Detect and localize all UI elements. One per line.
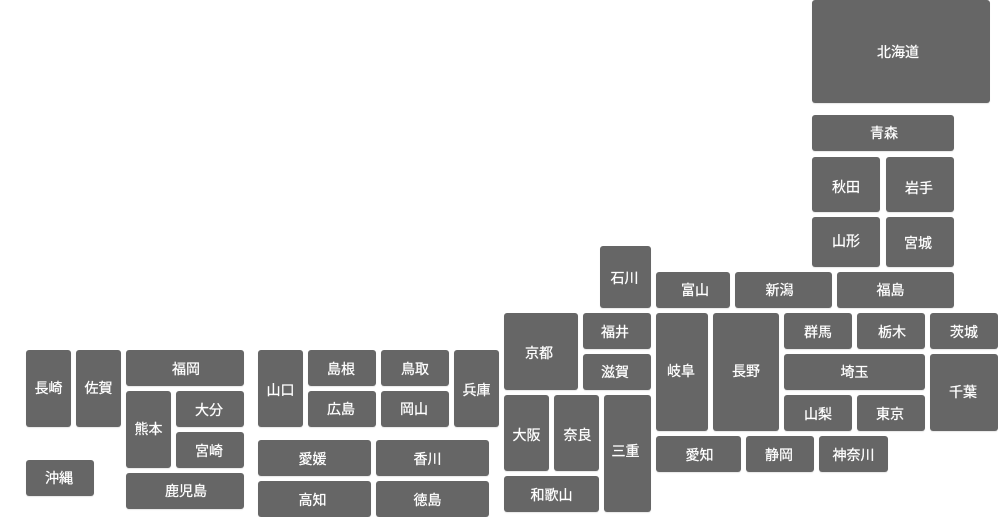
tile: Kagoshima xyxy=(126,473,244,509)
tile: Miyazaki xyxy=(176,432,244,468)
tile: Ishikawa: 石川 xyxy=(610,270,638,286)
tile: Okayama: 岡山 xyxy=(400,401,428,417)
tile: Kumamoto: 熊本 xyxy=(134,420,162,436)
tile: Wakayama: 和歌山 xyxy=(530,487,572,503)
tile: Kyoto: 京都 xyxy=(525,344,553,360)
tile: Tokushima: 徳島 xyxy=(414,492,442,508)
tile: Shiga xyxy=(583,354,651,390)
tile: Miyagi: 宮城 xyxy=(904,235,932,251)
tile: Saitama xyxy=(784,354,925,390)
tile: Toyama xyxy=(656,272,730,308)
tile: Fukuoka xyxy=(126,350,244,386)
tile: Okinawa: 沖縄 xyxy=(45,470,73,486)
tile: Kagoshima: 鹿児島 xyxy=(165,483,207,499)
tile: Iwate xyxy=(886,157,954,212)
tile: Saga xyxy=(76,350,121,427)
tile: Hyogo xyxy=(454,350,499,427)
tile: Shimane: 島根 xyxy=(327,361,355,377)
tile: Fukui xyxy=(583,313,651,349)
tile: Osaka: 大阪 xyxy=(512,427,540,443)
tile: Niigata: 新潟 xyxy=(766,282,794,298)
tile: Akita: 秋田 xyxy=(832,178,860,194)
tile: Gunma xyxy=(784,313,852,349)
tile: Chiba xyxy=(930,354,998,431)
tile: Kanagawa: 神奈川 xyxy=(832,447,874,463)
tile: Kagawa xyxy=(376,440,489,476)
tile: Tokushima xyxy=(376,481,489,517)
tile: Mie xyxy=(604,395,651,512)
tile: Tokyo xyxy=(857,395,925,431)
tile: Yamaguchi: 山口 xyxy=(266,382,294,398)
tile: Hokkaido xyxy=(812,0,990,103)
tile: Tottori: 鳥取 xyxy=(401,361,429,377)
tile: Ishikawa xyxy=(600,246,651,308)
tile: Niigata xyxy=(735,272,832,308)
tile: Tochigi: 栃木 xyxy=(878,324,906,340)
tile: Ehime xyxy=(258,440,371,476)
tile: Yamanashi xyxy=(784,395,852,431)
tile: Chiba: 千葉 xyxy=(949,384,977,400)
tile: Mie: 三重 xyxy=(612,442,640,458)
tile: Shiga: 滋賀 xyxy=(601,364,629,380)
tile: Nagano xyxy=(713,313,779,431)
tile: Tottori xyxy=(381,350,449,386)
tile: Wakayama xyxy=(504,476,599,512)
tile: Nara xyxy=(554,395,599,471)
tile: Aomori: 青森 xyxy=(870,125,898,141)
tile: Hyogo: 兵庫 xyxy=(462,382,490,398)
tile: Kochi: 高知 xyxy=(298,492,326,508)
tile: Kagawa: 香川 xyxy=(414,451,442,467)
tile: Nara: 奈良 xyxy=(564,427,592,443)
tile: Aichi: 愛知 xyxy=(686,447,714,463)
tile: Oita: 大分 xyxy=(195,402,223,418)
tile: Osaka xyxy=(504,395,549,471)
tile: Gifu xyxy=(656,313,708,431)
tile: Toyama: 富山 xyxy=(681,282,709,298)
tile: Yamagata xyxy=(812,217,880,267)
tile: Ibaraki: 茨城 xyxy=(950,324,978,340)
tile: Hiroshima xyxy=(308,391,376,427)
tile: Yamanashi: 山梨 xyxy=(804,406,832,422)
tile: Fukui: 福井 xyxy=(601,324,629,340)
tile: Kanagawa xyxy=(819,436,888,472)
tile: Saitama: 埼玉 xyxy=(840,364,868,380)
tile: Ibaraki xyxy=(930,313,998,349)
tile: Kyoto xyxy=(504,313,578,390)
tile: Yamaguchi xyxy=(258,350,303,427)
tile: Kochi xyxy=(258,481,371,517)
tile: Iwate: 岩手 xyxy=(905,180,933,196)
tile: Gifu: 岐阜 xyxy=(667,363,695,379)
tile: Nagano: 長野 xyxy=(732,363,760,379)
tile: Yamagata: 山形 xyxy=(832,233,860,249)
tile: Fukushima xyxy=(837,272,954,308)
tile: Shizuoka: 静岡 xyxy=(765,447,793,463)
tile: Okayama xyxy=(381,391,449,427)
tile: Hokkaido: 北海道 xyxy=(877,44,919,60)
tile: Saga: 佐賀 xyxy=(84,380,112,396)
tile: Tochigi xyxy=(857,313,925,349)
tile: Shizuoka xyxy=(746,436,814,472)
tile: Shimane xyxy=(308,350,376,386)
tile: Aichi xyxy=(656,436,741,472)
tile: Akita xyxy=(812,157,880,212)
tile: Miyagi xyxy=(886,217,954,267)
tile: Gunma: 群馬 xyxy=(804,324,832,340)
tile: Fukuoka: 福岡 xyxy=(172,361,200,377)
tile: Ehime: 愛媛 xyxy=(298,451,326,467)
tile: Nagasaki xyxy=(26,350,71,427)
tile: Aomori xyxy=(812,115,954,151)
tile: Fukushima: 福島 xyxy=(876,282,904,298)
tile: Oita xyxy=(176,391,244,427)
tile: Hiroshima: 広島 xyxy=(327,401,355,417)
tile: Kumamoto xyxy=(126,391,171,468)
tile: Miyazaki: 宮崎 xyxy=(195,443,223,459)
tile: Okinawa xyxy=(26,460,94,496)
tile: Tokyo: 東京 xyxy=(876,406,904,422)
tile: Nagasaki: 長崎 xyxy=(34,380,62,396)
